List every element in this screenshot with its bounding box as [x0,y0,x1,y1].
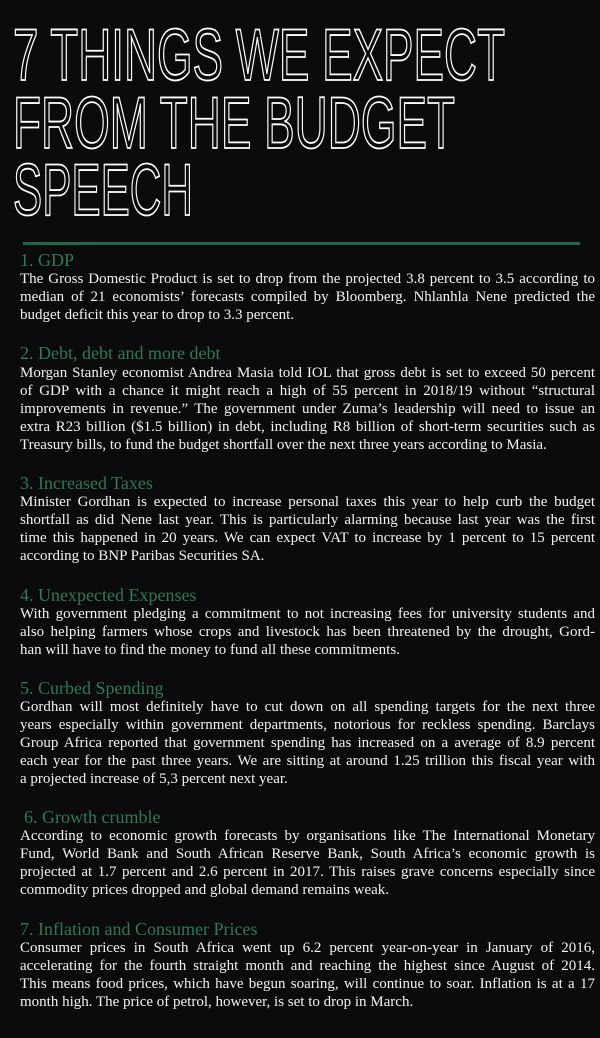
section 5 text: each year for the past three years. We are sitting at around 1.25 trillion this fiscal year with [20,753,595,769]
section 6 text: Fund, World Bank and South African Reserve Bank, South Africa’s economic growth is [20,846,595,862]
section 7 text: month high. The price of petrol, however, is set to drop in March. [20,994,413,1010]
section 5 text: Gordhan will most definitely have to cut down on all spending targets for the next three [20,699,595,715]
section 6 text [20,828,595,898]
section 5 text [20,699,595,787]
section 3 text: Minister Gordhan is expected to increase personal taxes this year to help curb the budget [20,494,595,510]
section 5 text: years especially within government departments, notorious for reckless spending. Barclays [20,717,595,733]
section 7 text: accelerating for the fourth straight month and reaching the highest since August of 2014. [20,958,595,974]
section 2 text: Treasury bills, to fund the budget shortfall over the next three years according to Masia. [20,437,547,453]
section 4 text: also helping farmers whose crops and livestock has been threatened by the drought, Gord- [20,624,595,640]
section 5 text: Group Africa reported that government spending has increased on a average of 8.9 percent [20,735,595,751]
section 1 text [20,271,595,323]
section 1 text: median of 21 economists’ forecasts compiled by Bloomberg. Nhlanhla Nene predicted the [20,289,595,305]
section 3 text: shortfall as did Nene last year. This is particularly alarming because last year was the first [20,512,595,528]
section 3 heading: 3. Increased Taxes [20,473,153,493]
section 2 text: improvements in revenue.” The government under Zuma’s leadership will need to issue an [20,401,595,417]
section 6 text: projected at 1.7 percent and 2.6 percent in 2017. This raises grave concerns especially since [20,864,595,880]
section 1 text: budget deficit this year to drop to 3.3 percent. [20,307,294,323]
section 4 text [20,606,595,658]
section 6 text: commodity prices dropped and global demand remains weak. [20,882,389,898]
title: SPEECH [13,150,193,230]
section 5 text: a projected increase of 5,3 percent next year. [20,771,288,787]
section 4 text: han will have to find the money to fund all these commitments. [20,642,400,658]
title [13,15,505,230]
section 1 text: The Gross Domestic Product is set to drop from the projected 3.8 percent to 3.5 according to [20,271,595,287]
section 4 text: With government pledging a commitment to not increasing fees for university students and [20,606,595,622]
section 2 heading: 2. Debt, debt and more debt [20,343,220,363]
section 2 text [20,365,595,453]
section 6 text: According to economic growth forecasts by organisations like The International Monetary [20,828,595,844]
section 7 text: This means food prices, which have begun soaring, will continue to soar. Inflation is at a 17 [20,976,595,992]
section 3 text: time this happened in 20 years. We can expect VAT to increase by 1 percent to 15 percent [20,530,595,546]
section 2 text: Morgan Stanley economist Andrea Masia told IOL that gross debt is set to exceed 50 percent [20,365,595,381]
section 5 heading: 5. Curbed Spending [20,678,164,698]
section 7 text [20,940,595,1010]
section 2 text: extra R23 billion ($1.5 billion) in debt, including R8 billion of short-term securities such as [20,419,595,435]
section 2 text: of GDP with a chance it might reach a high of 55 percent in 2018/19 without “structural [20,383,595,399]
section 6 heading: 6. Growth crumble [24,807,160,827]
section 3 text [20,494,595,564]
section 7 text: Consumer prices in South Africa went up 6.2 percent year-on-year in January of 2016, [20,940,595,956]
section 7 heading: 7. Inflation and Consumer Prices [20,919,257,939]
section 4 heading: 4. Unexpected Expenses [20,585,196,605]
section 1 heading: 1. GDP [20,250,74,270]
section 3 text: according to BNP Paribas Securities SA. [20,548,264,564]
